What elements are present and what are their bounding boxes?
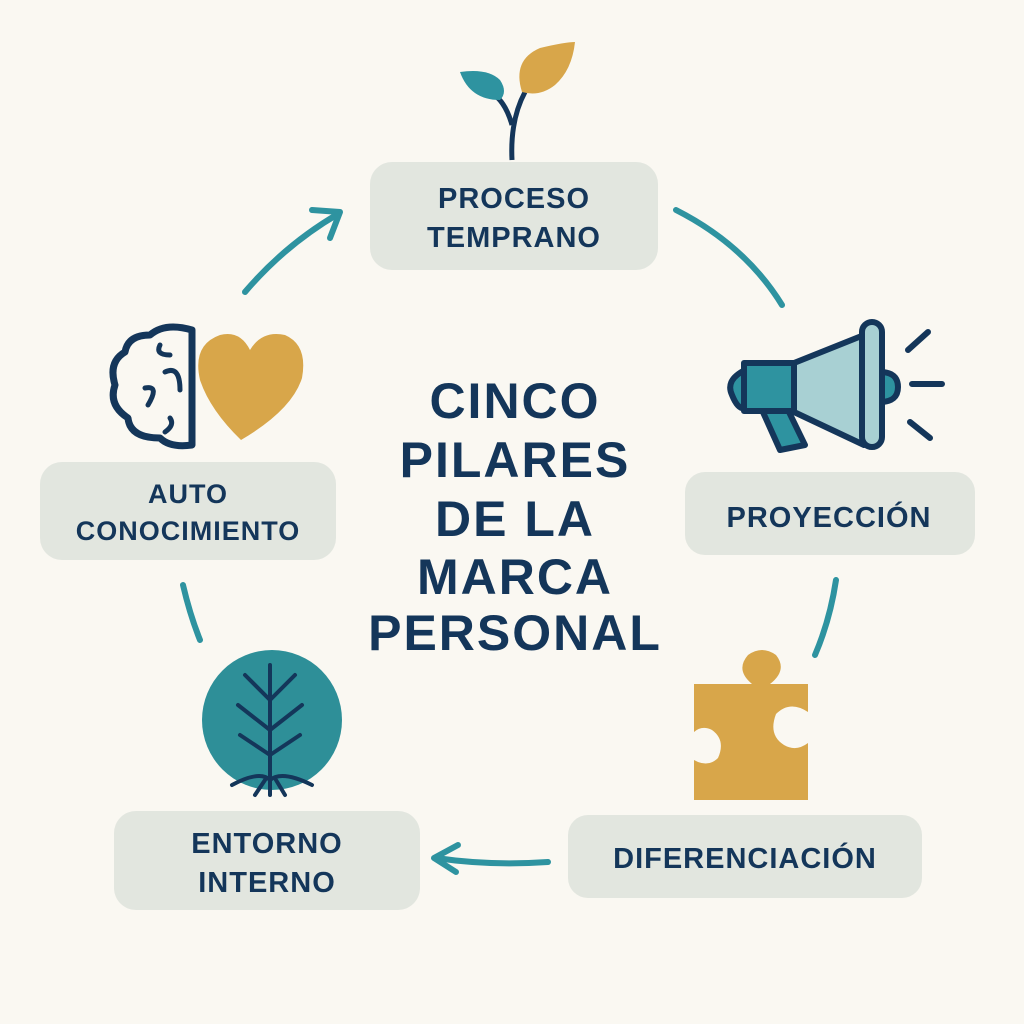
- icon: megaphone: [730, 322, 942, 450]
- panel: auto conocimiento: AUTO: [148, 479, 228, 509]
- icon: sprout: [460, 42, 575, 160]
- panel: entorno interno: [114, 811, 420, 910]
- panel: proceso temprano: TEMPRANO: [427, 222, 601, 254]
- title: [368, 373, 662, 661]
- title: MARCA: [417, 549, 613, 605]
- panel: diferenciacion: [568, 815, 922, 898]
- panel: proceso temprano: PROCESO: [438, 183, 590, 215]
- icon: puzzle piece: [694, 650, 808, 800]
- panel: entorno interno: ENTORNO: [191, 828, 343, 860]
- arrows: [183, 210, 836, 872]
- title: CINCO: [429, 373, 601, 429]
- panel: auto conocimiento: CONOCIMIENTO: [76, 516, 300, 546]
- panel: proceso temprano: [370, 162, 658, 270]
- icon: brain and heart: [113, 327, 303, 446]
- panel: entorno interno: INTERNO: [198, 867, 336, 899]
- panel: auto conocimiento: [40, 462, 336, 560]
- icon: tree: [202, 650, 342, 795]
- title: PERSONAL: [368, 605, 662, 661]
- panel: proyeccion: PROYECCIÓN: [727, 500, 931, 534]
- panel: proyeccion: [685, 472, 975, 555]
- title: PILARES: [400, 432, 630, 488]
- panel: diferenciacion: DIFERENCIACIÓN: [613, 841, 877, 875]
- title: DE LA: [435, 491, 595, 547]
